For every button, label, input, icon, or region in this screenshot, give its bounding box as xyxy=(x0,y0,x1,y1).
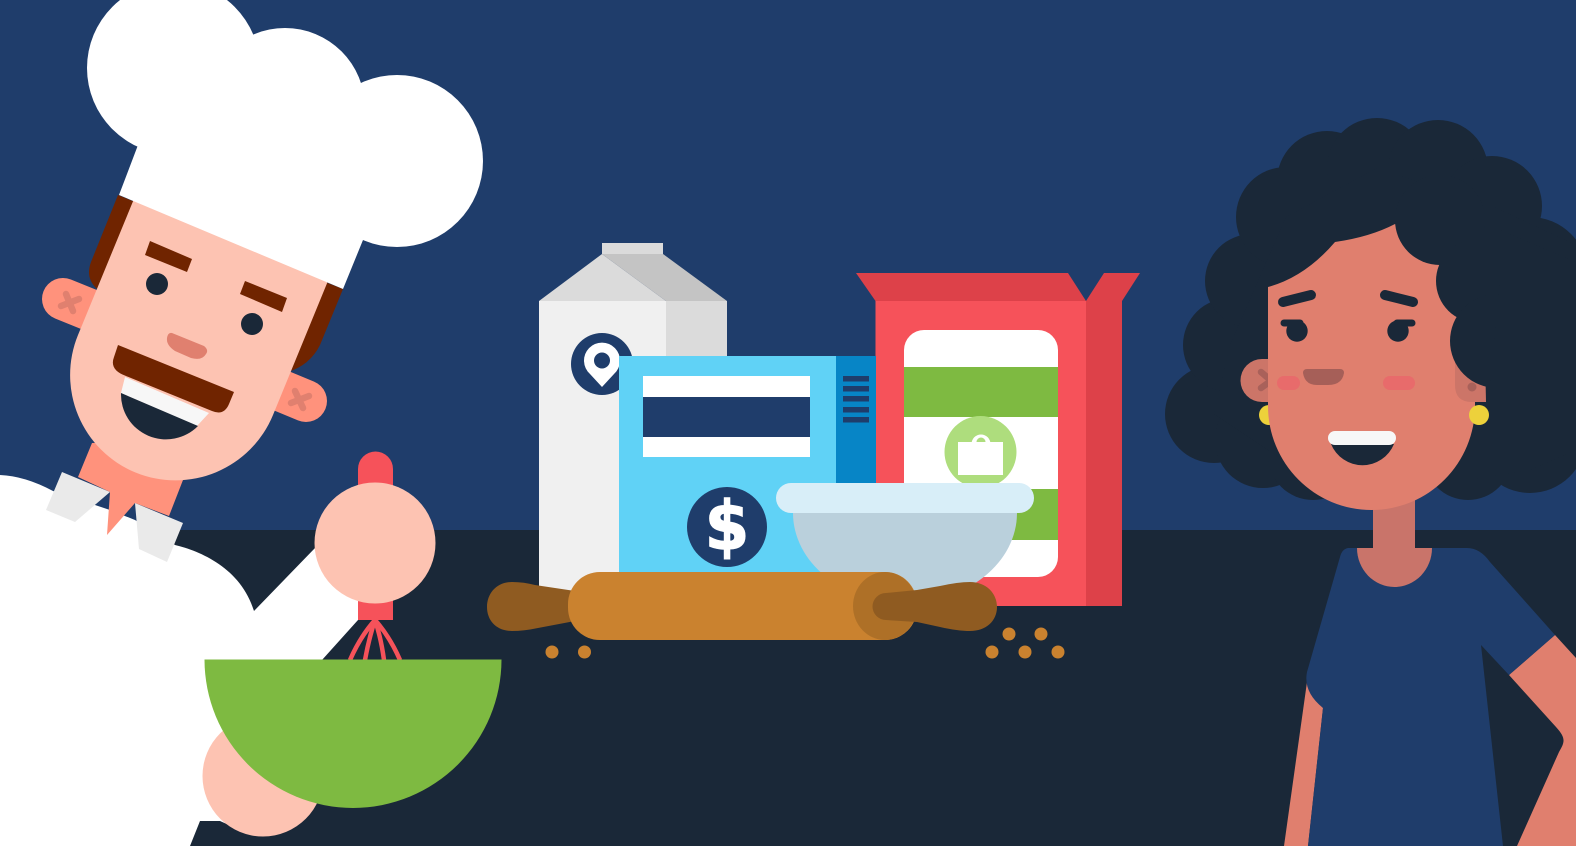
chef ears xyxy=(61,294,309,408)
icon: dollar: $ xyxy=(705,487,749,565)
mixing bowl xyxy=(776,483,1034,603)
icon: shopping bag xyxy=(944,416,1016,488)
chef hair xyxy=(89,195,343,372)
flour crumbs xyxy=(546,628,1064,658)
right arm xyxy=(1509,635,1576,846)
right ear xyxy=(1455,355,1486,402)
chef hat xyxy=(87,0,483,289)
eyes xyxy=(1284,320,1412,342)
chef neck xyxy=(78,440,190,535)
customer xyxy=(1165,118,1576,846)
neck xyxy=(1373,495,1415,551)
eyebrows xyxy=(1283,295,1413,302)
chef eyebrows xyxy=(145,241,287,312)
collar left xyxy=(46,472,110,522)
chef nose xyxy=(167,333,207,359)
chef lower hand xyxy=(202,716,324,836)
green bowl xyxy=(204,660,502,808)
left earring xyxy=(1259,405,1279,425)
chef xyxy=(0,0,502,846)
chef eyes xyxy=(146,273,263,335)
right earring xyxy=(1469,405,1489,425)
left arm xyxy=(1284,682,1323,846)
chef face xyxy=(70,194,330,480)
face xyxy=(1268,224,1475,510)
back hair xyxy=(1165,118,1576,500)
background wall xyxy=(0,0,1576,530)
mouth xyxy=(1328,431,1396,465)
left ear xyxy=(1240,359,1270,402)
whisk xyxy=(350,452,400,660)
blue box xyxy=(619,356,876,576)
icon: location pin xyxy=(571,333,633,395)
nose xyxy=(1303,369,1344,385)
milk carton xyxy=(539,243,727,596)
chef mouth xyxy=(121,377,209,439)
red cereal box xyxy=(856,273,1140,606)
neckline xyxy=(1357,548,1432,587)
chef upper hand xyxy=(314,482,436,604)
icon: dollar xyxy=(687,487,767,567)
collar right xyxy=(135,503,183,562)
chef jacket xyxy=(0,475,380,846)
shirt xyxy=(1306,548,1555,846)
chef mustache xyxy=(113,345,234,412)
rolling pin xyxy=(487,572,997,640)
floor xyxy=(0,530,1576,846)
front hair curls xyxy=(1395,175,1576,388)
blush xyxy=(1277,376,1415,390)
